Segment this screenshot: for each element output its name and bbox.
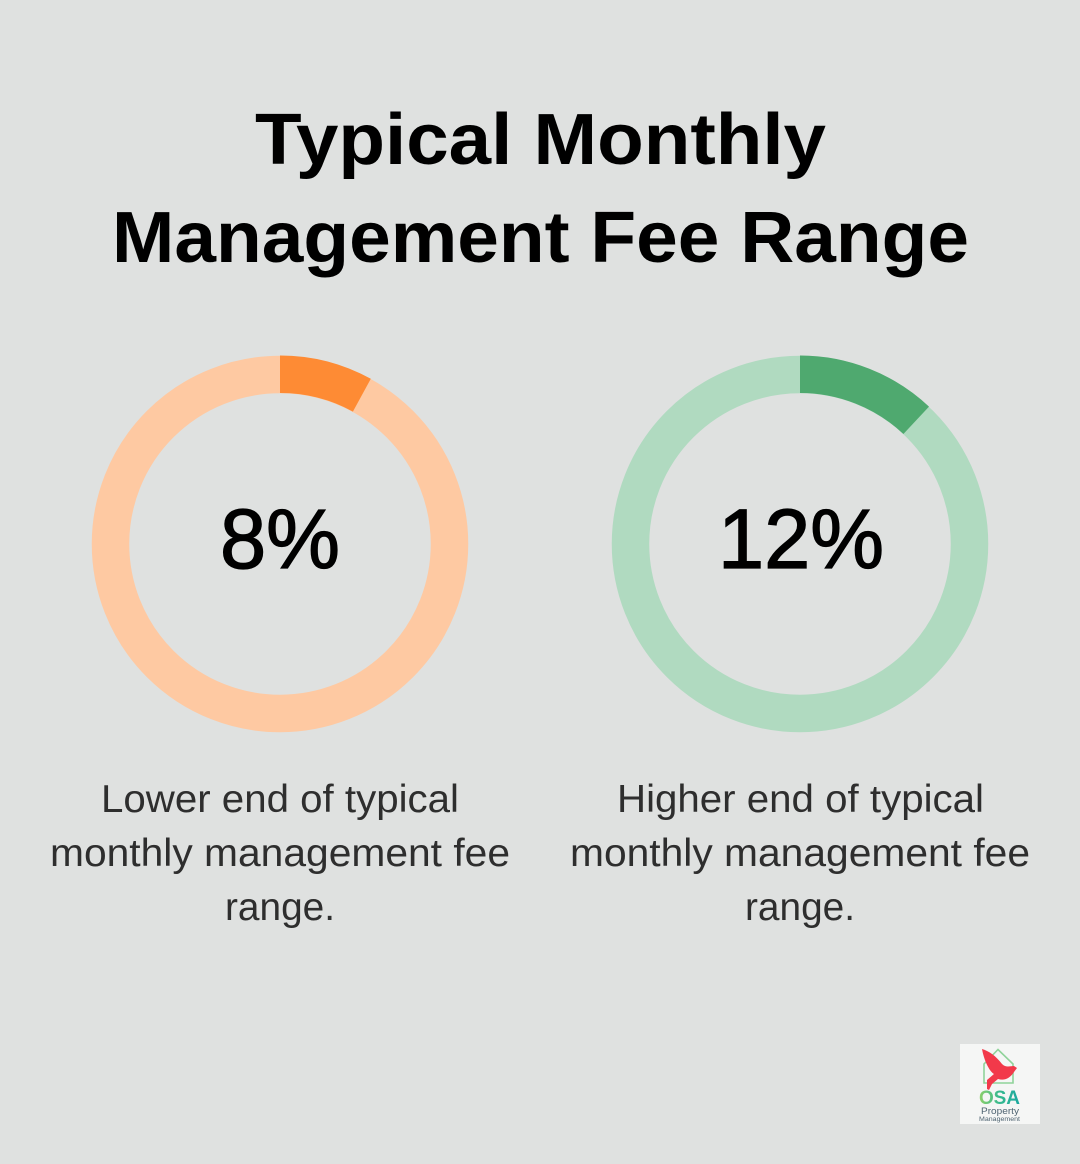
title: Management Fee Range	[112, 198, 969, 278]
donut chart: 12%	[630, 356, 970, 714]
value: 12%: 12%	[718, 492, 884, 586]
donut chart: 8%	[110, 356, 450, 714]
title	[112, 100, 969, 278]
description: higher end	[570, 778, 1030, 929]
description: lower end: Lower end of typical	[101, 778, 459, 821]
logo: OSA Property Management	[960, 1044, 1040, 1124]
panel: lower end 8%	[50, 356, 510, 929]
description: higher end: Higher end of typical	[617, 778, 984, 821]
value: 8%: 8%	[220, 492, 340, 586]
logo: OSA Property Management: Property	[981, 1106, 1019, 1117]
description: lower end	[50, 778, 510, 929]
description: lower end: range.	[225, 886, 335, 929]
logo wordmark: OSA	[979, 1088, 1020, 1109]
title: Typical Monthly	[255, 100, 826, 180]
description: higher end: monthly management fee	[570, 832, 1030, 875]
icon: house outline	[984, 1050, 1013, 1083]
panel: higher end 12%	[570, 356, 1030, 929]
icon: red bird	[982, 1049, 1017, 1090]
logo: OSA Property Management: Management	[979, 1116, 1020, 1123]
description: lower end: monthly management fee	[50, 832, 510, 875]
description: higher end: range.	[745, 886, 855, 929]
